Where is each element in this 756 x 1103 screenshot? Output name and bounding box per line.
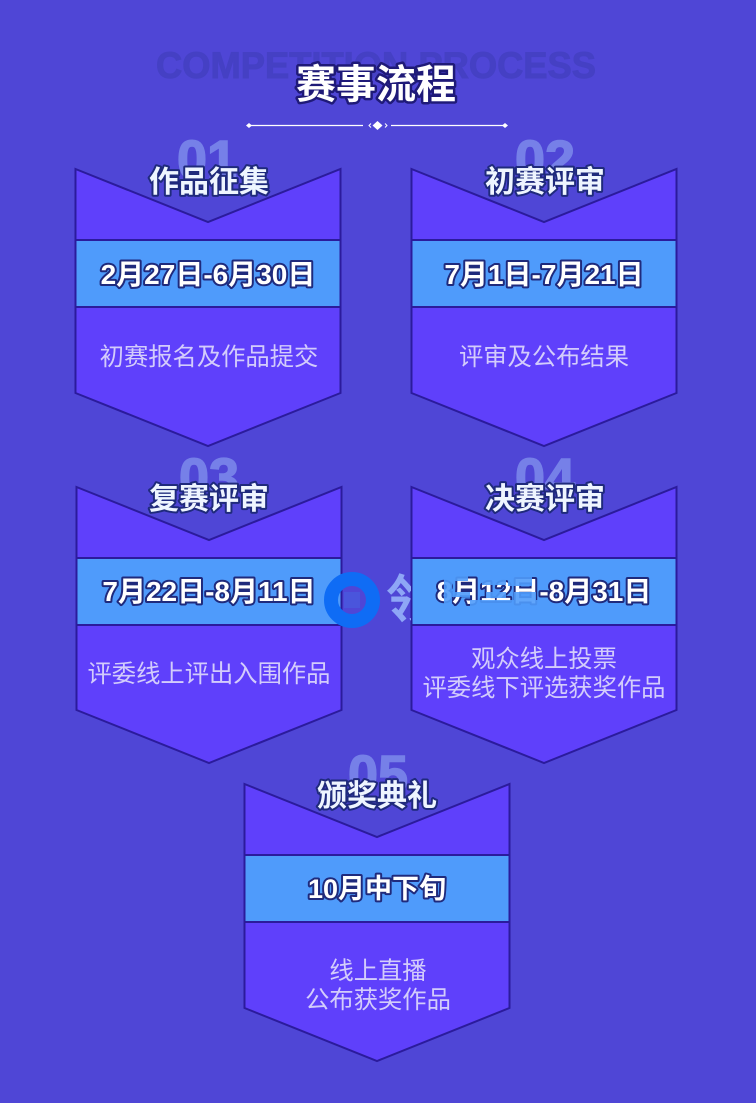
panel 03: 复赛评审 bbox=[76, 448, 342, 763]
date band bbox=[244, 855, 510, 922]
description: 初赛报名及作品提交 bbox=[100, 344, 318, 371]
description line two: 评委线下评选获奖作品 bbox=[423, 675, 665, 702]
panel 05: 颁奖典礼 bbox=[244, 745, 510, 1061]
title: 赛事流程 bbox=[296, 63, 456, 107]
panel 01: 作品征集 bbox=[76, 130, 340, 446]
background heading: COMPETITION PROCESS: COMPETITION PROCESS bbox=[156, 44, 596, 86]
date: 10月中下旬 bbox=[308, 874, 446, 904]
date: 8月12日-8月31日 bbox=[437, 576, 651, 607]
description: 观众线上投票 bbox=[471, 646, 617, 673]
date: 7月22日-8月11日 bbox=[102, 576, 316, 607]
description line two: 公布获奖作品 bbox=[305, 987, 451, 1014]
step number 04: 04 bbox=[515, 448, 575, 508]
panel heading: 初赛评审 bbox=[485, 166, 605, 199]
step number 03: 03 bbox=[179, 448, 239, 508]
description: 评委线上评出入围作品 bbox=[88, 661, 330, 688]
step number 01: 01 bbox=[177, 130, 237, 190]
watermark bbox=[331, 572, 540, 630]
date band bbox=[412, 240, 676, 307]
date band bbox=[76, 240, 340, 307]
panel shape bbox=[412, 169, 676, 446]
watermark: 领 bbox=[386, 572, 438, 630]
panel shape bbox=[412, 487, 676, 763]
panel 04: 决赛评审 bbox=[412, 448, 676, 763]
panel shape bbox=[76, 169, 340, 446]
panel heading: 复赛评审 bbox=[149, 483, 269, 516]
date band bbox=[76, 558, 342, 625]
title divider bbox=[246, 121, 508, 130]
panel heading: 颁奖典礼 bbox=[317, 780, 437, 813]
date band bbox=[412, 558, 676, 625]
step number 05: 05 bbox=[348, 745, 408, 805]
description: 线上直播 bbox=[329, 958, 427, 985]
description: 评审及公布结果 bbox=[459, 344, 629, 371]
panel heading: 作品征集 bbox=[149, 166, 269, 199]
panel 02: 初赛评审 bbox=[412, 130, 676, 446]
panel heading: 决赛评审 bbox=[485, 483, 605, 516]
date: 2月27日-6月30日 bbox=[101, 259, 315, 290]
panel shape bbox=[76, 487, 342, 763]
panel shape bbox=[244, 784, 510, 1061]
step number 02: 02 bbox=[515, 130, 575, 190]
date: 7月1日-7月21日 bbox=[444, 259, 644, 290]
